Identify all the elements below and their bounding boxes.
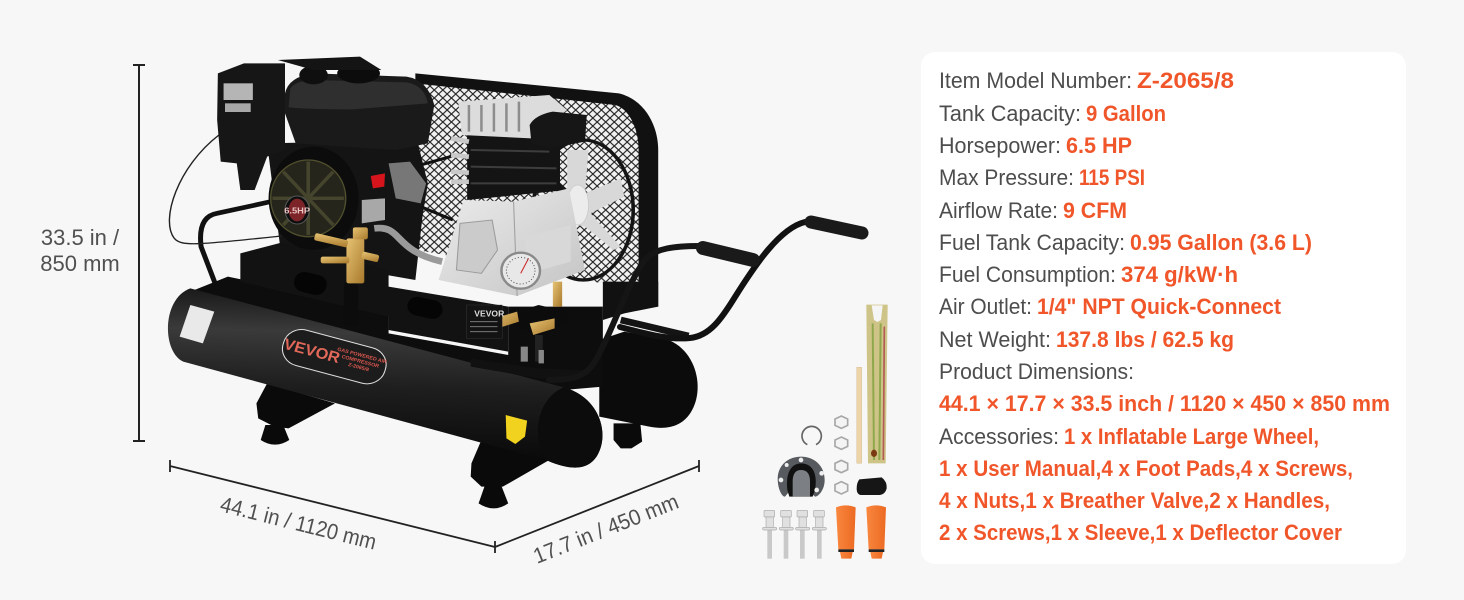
- spec: accessories: [939, 424, 1353, 545]
- rear left foot: [256, 383, 335, 445]
- yellow tank warning label: [506, 415, 527, 444]
- spec: airflow rate: Airflow Rate:: [939, 198, 1058, 223]
- warning sticker: [180, 305, 214, 343]
- left frame tube: [201, 202, 271, 293]
- front right foot: [471, 440, 549, 508]
- spec: air outlet: 1/4" NPT Quick-Connect: [1037, 294, 1282, 319]
- rubber deflector: [857, 477, 887, 495]
- socket wrench: [866, 305, 888, 463]
- accessories: [763, 305, 888, 559]
- spec plate: [466, 305, 504, 338]
- length dimension: [170, 460, 495, 555]
- spec: fuel tank capacity: 0.95 Gallon (3.6 L): [1130, 230, 1312, 255]
- rear frame plate: [603, 282, 658, 320]
- spec: fuel tank capacity: Fuel Tank Capacity:: [939, 230, 1125, 255]
- recoil starter: [269, 147, 359, 250]
- badge subtitle: Z-2065/8: [347, 362, 370, 373]
- spec: max pressure: Max Pressure:: [939, 165, 1074, 190]
- height label: 850 mm: [40, 251, 120, 276]
- four screws: [763, 510, 826, 559]
- platform slots: [292, 270, 445, 321]
- spec: fuel consumption: 374 g/kW·h: [1121, 262, 1238, 287]
- rear tank: [599, 332, 698, 428]
- engine control box: [217, 63, 285, 190]
- pump crankcase: [439, 188, 585, 296]
- intake box: [530, 112, 587, 148]
- engine body: [267, 140, 428, 280]
- rear right foot: [614, 423, 642, 448]
- spec: accessories: 1 x User Manual,4 x Foot Pads,4 x Screws,: [939, 456, 1353, 481]
- spec: net weight: Net Weight:: [939, 327, 1051, 352]
- spec: model number: Z-2065/8: [1137, 68, 1234, 93]
- pump head: [458, 95, 567, 138]
- silver hose: [374, 228, 442, 262]
- recoil starter: 6.5HP: [284, 206, 310, 215]
- under-platform body: [190, 277, 603, 390]
- length label: 44.1 in / 1120 mm: [218, 492, 379, 555]
- spec: tank capacity: 9 Gallon: [1086, 101, 1166, 126]
- spec plate: VEVOR: [474, 309, 504, 319]
- hex nuts: [835, 416, 848, 494]
- lower rail: [471, 358, 581, 378]
- valve standpipe: [344, 283, 358, 326]
- spec: model number: Item Model Number:: [939, 68, 1132, 93]
- height label: 33.5 in /: [41, 225, 120, 250]
- spec: net weight: 137.8 lbs / 62.5 kg: [1056, 327, 1234, 352]
- brass valve: [314, 227, 380, 283]
- tank badge: [278, 325, 391, 388]
- breather flange: [778, 457, 825, 497]
- spec: max pressure: 115 PSI: [1079, 165, 1145, 190]
- fan wheel: [533, 140, 633, 280]
- pump cylinder: [467, 133, 567, 200]
- spec: horsepower: 6.5 HP: [1066, 133, 1132, 158]
- manifold: [494, 282, 569, 363]
- spec: horsepower: Horsepower:: [939, 133, 1061, 158]
- fuel tank: [278, 57, 434, 150]
- spec: airflow rate: 9 CFM: [1063, 198, 1127, 223]
- front tank end cap: [538, 387, 603, 468]
- width label: 17.7 in / 450 mm: [530, 489, 682, 569]
- front tank: [168, 288, 603, 468]
- spec: product dimensions value: 44.1 × 17.7 × 33.5 inch / 1120 × 450 × 850 mm: [939, 391, 1390, 416]
- rear handle: [620, 222, 862, 338]
- mesh guard: [417, 80, 639, 283]
- pressure gauge: [501, 253, 540, 289]
- brand text: VEVOR: [282, 336, 342, 367]
- front handle: [549, 246, 753, 380]
- tommy bar: [857, 367, 862, 463]
- rear tank fittings: [621, 320, 689, 336]
- spec: accessories: 2 x Screws,1 x Sleeve,1 x Deflector Cover: [939, 520, 1342, 545]
- spec: accessories: 1 x Inflatable Large Wheel,: [1064, 424, 1319, 449]
- panel: specifications: [921, 52, 1406, 564]
- spec: accessories: Accessories:: [939, 424, 1059, 449]
- air compressor illustration: [168, 57, 698, 508]
- retaining ring: [802, 426, 821, 445]
- spec: air outlet: Air Outlet:: [939, 294, 1032, 319]
- orange handle grips: [836, 505, 886, 559]
- spec: product dimensions label: Product Dimensions:: [939, 359, 1134, 384]
- spec: accessories: 4 x Nuts,1 x Breather Valve,2 x Handles,: [939, 488, 1330, 513]
- spec: tank capacity: Tank Capacity:: [939, 101, 1081, 126]
- height dimension: [40, 65, 145, 441]
- cylinder cooling fins: [451, 138, 556, 183]
- width dimension: [495, 460, 699, 569]
- guard frame: [415, 73, 658, 307]
- throttle cable: [169, 135, 281, 244]
- badge subtitle: GAS POWERED AIR: [336, 347, 388, 366]
- spec: fuel consumption: Fuel Consumption:: [939, 262, 1116, 287]
- starter and carburetor details: [362, 155, 456, 223]
- badge subtitle: COMPRESSOR: [341, 354, 380, 370]
- platform: [240, 243, 508, 352]
